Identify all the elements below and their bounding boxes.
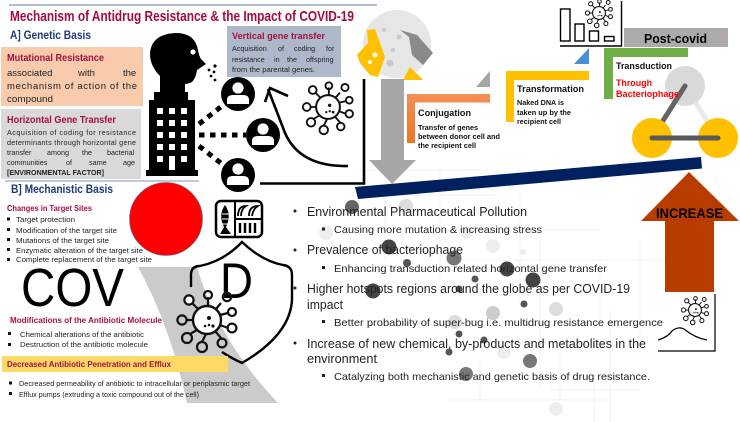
text block: environmental impact list: Causing more mutation & increasing stress	[334, 224, 542, 236]
text block: environmental impact list	[294, 204, 663, 383]
panel: horizontal gene transfer: among	[47, 148, 69, 157]
panel: mutational resistance: the	[123, 68, 136, 79]
panel: horizontal gene transfer: the	[82, 148, 92, 157]
panel: transduction: Transduction	[616, 61, 672, 72]
title: Mechanism of Antidrug Resistance & the Impact of COVID-19	[10, 8, 354, 25]
panel: horizontal gene transfer: communities	[7, 158, 48, 167]
label: post-covid	[624, 28, 728, 47]
text block: environmental impact list: Higher hotspots regions around the globe as per COVID-19	[307, 281, 630, 296]
panel: mutational resistance: associated	[7, 68, 52, 79]
panel: transformation: Naked DNA is	[517, 100, 564, 107]
arrow: down	[369, 79, 416, 184]
icon: blue step triangle	[574, 48, 589, 64]
panel: conjugation: the recipient cell	[418, 143, 476, 150]
label: post-covid: Post-covid	[644, 31, 707, 46]
text block: modifications of the antibiotic molecule	[8, 316, 163, 349]
text block: permeability and efflux	[9, 381, 250, 399]
text block: changes in target sites: Target protection	[16, 215, 75, 224]
text block: environmental impact list: environment	[307, 351, 377, 366]
panel: mutational resistance: with	[77, 68, 95, 79]
icon: person bottom	[221, 158, 255, 192]
panel: vertical gene transfer: of	[278, 44, 284, 53]
banner: decreased antibiotic penetration: Decreased Antibiotic Penetration and Efflux	[7, 360, 172, 369]
panel: vertical gene transfer: in	[274, 55, 280, 64]
text block: permeability and efflux: Decreased permeability of antibiotic to intracellular or periplasmic target	[19, 381, 250, 388]
chart axes	[260, 79, 364, 184]
text block: permeability and efflux: Efflux pumps (extruding a toxic compound out of the cell)	[19, 392, 199, 399]
heading: mechanistic basis: B] Mechanistic Basis	[11, 182, 113, 196]
top rule	[9, 4, 377, 6]
panel: vertical gene transfer: offspring	[306, 55, 333, 64]
panel: horizontal gene transfer: transfer	[7, 148, 32, 157]
panel: mutational resistance: mechanism of action of the	[7, 81, 137, 92]
illustration: bacteria blob	[357, 10, 433, 80]
icon: bar chart with virus	[560, 0, 622, 46]
rule	[5, 180, 199, 182]
panel: horizontal gene transfer: of	[66, 158, 72, 167]
text block: environmental impact list: Prevalence of bacteriophage	[307, 242, 463, 257]
panel: vertical gene transfer: from the parental genes.	[232, 65, 315, 74]
panel: vertical gene transfer: resistance	[232, 55, 265, 64]
panel: vertical gene transfer	[227, 26, 341, 77]
arrow: increase	[641, 172, 739, 292]
panel: transduction	[604, 48, 688, 100]
panel: horizontal gene transfer	[1, 109, 141, 179]
icon: grey step triangle	[476, 71, 490, 87]
panel: mutational resistance	[1, 47, 143, 106]
icon: virus over curve	[303, 82, 353, 134]
bar: navy balance beam	[355, 157, 702, 199]
text block: environmental impact list: Increase of new chemical, by-products and metabolites in the	[307, 336, 646, 351]
panel: horizontal gene transfer: age	[123, 158, 135, 167]
panel: conjugation: between donor cell and	[418, 134, 500, 141]
panel: transformation: taken up by the	[517, 110, 571, 117]
panel: mutational resistance: compound	[7, 94, 53, 105]
text block: modifications of the antibiotic molecule: Modifications of the Antibiotic Molecule	[10, 316, 163, 325]
text block: environmental impact list: Better probability of super-bug i.e. multidrug resistance emergence	[334, 317, 663, 329]
panel: horizontal gene transfer: bacterial	[107, 148, 135, 157]
text block: modifications of the antibiotic molecule: Destruction of the antibiotic molecule	[20, 340, 148, 349]
icon: large virus	[177, 291, 236, 352]
panel: vertical gene transfer: for	[326, 44, 335, 53]
text block: changes in target sites: Complete replacement of the target site	[16, 255, 152, 264]
text block: environmental impact list: impact	[307, 297, 343, 312]
text block: modifications of the antibiotic molecule: Chemical alterations of the antibiotic	[20, 330, 144, 339]
icon: grey swoosh	[138, 267, 278, 403]
panel: horizontal gene transfer: determinants through horizontal gene	[7, 138, 136, 147]
text block: environmental impact list: Environmental Pharmaceutical Pollution	[307, 204, 527, 219]
icon: person middle	[246, 118, 280, 152]
panel: vertical gene transfer: Acquisition	[232, 44, 267, 53]
panel: transduction: Bacteriophage	[616, 89, 679, 100]
panel: horizontal gene transfer: Acquisition of coding for resistance	[7, 128, 136, 137]
text block: changes in target sites: Enzymatic alteration of the target site	[16, 246, 143, 255]
text block: changes in target sites: Mutations of the target site	[16, 236, 109, 245]
D large text: D	[220, 253, 253, 309]
panel: horizontal gene transfer: Horizontal Gene Transfer	[7, 115, 116, 126]
panel: horizontal gene transfer: same	[89, 158, 107, 167]
banner: decreased antibiotic penetration	[2, 356, 228, 372]
text block: environmental impact list: Catalyzing both mechanistic and genetic basis of drug resistance.	[334, 371, 650, 383]
text block: changes in target sites: Modification of the target site	[16, 226, 117, 235]
panel: horizontal gene transfer: [ENVIRONMENTAL FACTOR]	[7, 170, 104, 177]
panel: vertical gene transfer: coding	[294, 44, 315, 53]
red circle	[130, 182, 202, 256]
panel: transduction: Through	[616, 78, 652, 89]
panel: transformation: Transformation	[517, 84, 584, 95]
panel: vertical gene transfer: the	[287, 55, 297, 64]
icon: head on building	[146, 33, 217, 176]
panel: vertical gene transfer: Vertical gene transfer	[232, 31, 325, 42]
panel: conjugation: Transfer of genes	[418, 125, 478, 132]
icon: person top	[221, 77, 255, 111]
panel: mutational resistance: Mutational Resistance	[7, 53, 104, 64]
panel: transformation	[506, 71, 589, 126]
icon: curve arrow	[265, 88, 348, 166]
text block: changes in target sites: Changes in Target Sites	[7, 204, 93, 213]
icon: shield	[191, 242, 292, 363]
panel: conjugation: Conjugation	[418, 108, 471, 119]
panel: transformation: recipient cell	[517, 119, 561, 126]
text block: changes in target sites	[7, 204, 152, 264]
background world map dots	[319, 135, 680, 422]
icon: network triangle	[632, 66, 738, 158]
heading: genetic basis: A] Genetic Basis	[10, 28, 91, 42]
icon: dotted connectors	[199, 106, 246, 164]
text block: environmental impact list: Enhancing transduction related horizontal gene transfer	[334, 263, 608, 275]
icon: epidemic curve with virus	[658, 294, 715, 351]
arrow: increase: INCREASE	[656, 205, 723, 221]
COV large text: COV	[21, 258, 124, 318]
panel: conjugation	[407, 94, 500, 150]
icon: food tray	[216, 201, 262, 237]
